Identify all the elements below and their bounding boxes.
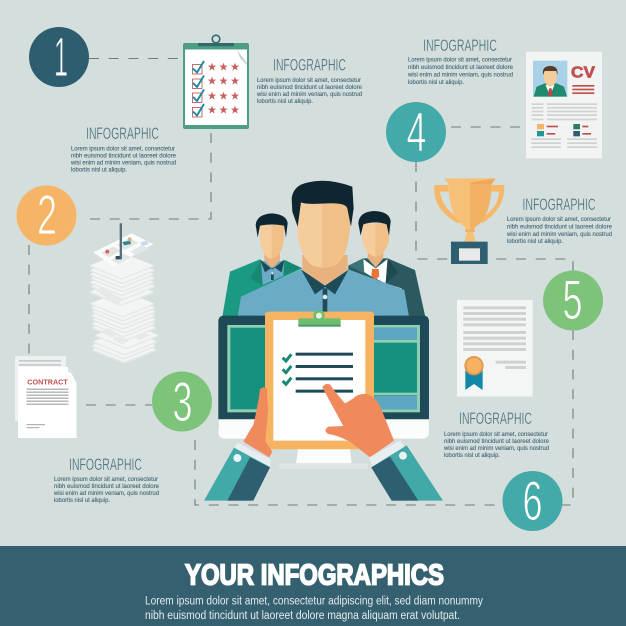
text block: step 4: nibh euismod tincidunt ut laoreet dolore [408, 64, 513, 71]
step 6 badge [502, 469, 562, 532]
icon: CV document: CV [571, 64, 596, 81]
text block: step 6: nibh euismod tincidunt ut laoreet dolore [444, 438, 549, 445]
step 6 badge: 6 [522, 469, 542, 532]
step 2 badge: 2 [37, 183, 57, 246]
step 3 badge [152, 370, 212, 433]
right hand [322, 384, 443, 501]
icon: paper stack [90, 223, 158, 364]
step 1 badge: 1 [54, 25, 68, 88]
text block: step 4: wisi enim ad minim veniam, quis nostrud [407, 72, 513, 78]
text block: step 4: lobortis nisl ut aliquip. [408, 79, 464, 86]
icon: rating clipboard [183, 35, 249, 129]
icon: contract document [15, 356, 76, 438]
text block: step 2: nibh euismod tincidunt ut laoreet dolore [71, 152, 176, 160]
footer text: nibh euismod tincidunt ut laoreet dolore magna aliquam erat volutpat. [145, 610, 460, 622]
footer band [0, 546, 626, 626]
text block: step 1: wisi enim ad minim veniam, quis nostrud [256, 91, 362, 98]
icon: certificate [457, 300, 533, 397]
text block: step 1: nibh euismod tincidunt ut laoreet dolore [257, 84, 362, 91]
text block: step 3: lobortis nisl ut aliquip. [54, 497, 110, 504]
clipboard [265, 310, 374, 449]
text block: step 1 [256, 56, 362, 105]
text block: step 5: wisi enim ad minim veniam, quis nostrud [506, 231, 612, 238]
right colleague [348, 211, 426, 318]
text block: step 2: lobortis nisl ut aliquip. [71, 166, 127, 174]
text block: step 2: INFOGRAPHIC [86, 125, 159, 143]
icon: CV document [526, 52, 602, 158]
text block: step 1: INFOGRAPHIC [273, 56, 346, 74]
central figure: team, monitor, clipboard and hands [204, 181, 443, 501]
icon: contract document: CONTRACT [27, 380, 69, 386]
text block: step 3: wisi enim ad minim veniam, quis nostrud [53, 490, 159, 497]
step 5 badge [543, 268, 603, 331]
text block: step 4: Lorem ipsum dolor sit amet, consectetur [408, 56, 513, 64]
step 3 badge: 3 [172, 370, 192, 433]
text block: step 6: INFOGRAPHIC [459, 410, 532, 428]
footer title: YOUR INFOGRAPHICS [185, 560, 444, 592]
text block: step 3: nibh euismod tincidunt ut laoreet dolore [54, 483, 159, 490]
left colleague [222, 213, 302, 317]
text block: step 6: Lorem ipsum dolor sit amet, consectetur [444, 431, 549, 438]
text block: step 3 [53, 456, 159, 504]
connector dashed lines [29, 58, 573, 505]
step 4 badge: 4 [406, 100, 426, 163]
text block: step 3: INFOGRAPHIC [69, 456, 142, 474]
text block: step 2 [70, 125, 176, 174]
team of three men [222, 181, 426, 318]
step 5 badge: 5 [562, 268, 582, 331]
text block: step 4 [407, 37, 513, 86]
text block: step 6 [443, 410, 549, 459]
text block: step 2: wisi enim ad minim veniam, quis nostrud [70, 160, 176, 166]
left hand [204, 387, 272, 501]
monitor [218, 316, 429, 469]
text block: step 5: lobortis nisl ut aliquip. [507, 238, 563, 245]
text block: step 2: Lorem ipsum dolor sit amet, consectetur [71, 146, 176, 152]
text block: step 1: lobortis nisl ut aliquip. [257, 98, 313, 105]
text block: step 5: Lorem ipsum dolor sit amet, consectetur [507, 216, 612, 223]
text block: step 5 [506, 196, 612, 245]
text block: step 6: wisi enim ad minim veniam, quis nostrud [443, 445, 549, 452]
step 1 badge [29, 25, 89, 88]
text block: step 3: Lorem ipsum dolor sit amet, consectetur [54, 476, 159, 483]
text block: step 5: nibh euismod tincidunt ut laoreet dolore [507, 224, 612, 230]
icon: trophy [434, 178, 504, 264]
step 2 badge [16, 183, 76, 246]
footer text: Lorem ipsum dolor sit amet, consectetur adipiscing elit, sed diam nonummy [145, 596, 483, 608]
text block: step 4: INFOGRAPHIC [423, 37, 497, 55]
step 4 badge [386, 100, 446, 163]
main figure [238, 181, 409, 317]
text block: step 6: lobortis nisl ut aliquip. [444, 452, 500, 459]
footer text [145, 596, 483, 622]
text block: step 1: Lorem ipsum dolor sit amet, consectetur [257, 77, 362, 84]
